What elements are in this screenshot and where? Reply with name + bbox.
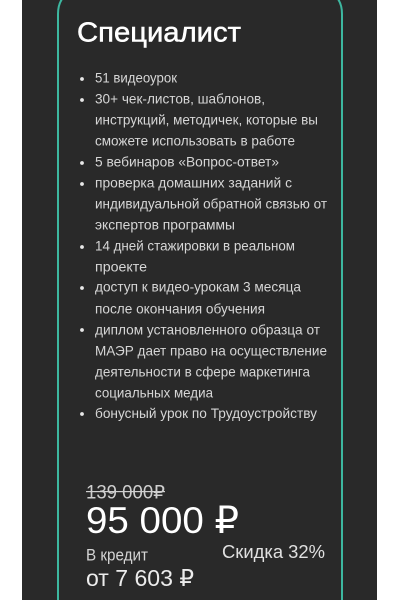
list item: internship: 14 дней стажировки в реальном bbox=[95, 238, 295, 254]
title: Специалист bbox=[77, 16, 241, 48]
credit price: от 7 603 ₽ bbox=[86, 565, 194, 591]
discount label: Скидка 32% bbox=[222, 541, 325, 562]
list item: internship: проекте bbox=[95, 258, 147, 274]
list item: homework review: экспертов программы bbox=[95, 216, 235, 232]
panel: teal rounded card outline bbox=[58, 0, 342, 600]
list item: homework review: проверка домашних заданий с bbox=[95, 174, 292, 190]
credit label: В кредит bbox=[86, 546, 148, 564]
list item: diploma: деятельности в сфере маркетинга bbox=[95, 364, 310, 380]
list item: video lessons: 51 видеоурок bbox=[95, 70, 178, 86]
list item: checklists and templates: инструкций, методичек, которые вы bbox=[95, 112, 318, 128]
feature list bbox=[80, 70, 328, 421]
list item: diploma: диплом установленного образца от bbox=[95, 322, 321, 338]
list item: webinars: 5 вебинаров «Вопрос-ответ» bbox=[95, 154, 279, 170]
list item: checklists and templates bbox=[80, 90, 318, 148]
list item: video access: после окончания обучения bbox=[95, 300, 265, 316]
old price, struck through: 139 000₽ bbox=[86, 482, 165, 504]
list item: checklists and templates: сможете использовать в работе bbox=[95, 132, 295, 148]
list item: internship bbox=[80, 238, 295, 274]
list item: bonus lesson: бонусный урок по Трудоустройству bbox=[95, 405, 317, 421]
list item: diploma: социальных медиа bbox=[95, 384, 213, 400]
list item: homework review: индивидуальной обратной связью от bbox=[95, 196, 328, 212]
list item: checklists and templates: 30+ чек-листов, шаблонов, bbox=[95, 90, 265, 106]
list item: diploma: МАЭР дает право на осуществление bbox=[95, 342, 327, 358]
current price: 95 000 ₽ bbox=[86, 500, 239, 541]
list item: homework review bbox=[80, 174, 328, 232]
list item: diploma bbox=[80, 322, 327, 400]
list item: video access bbox=[80, 278, 301, 316]
list item: video access: доступ к видео-урокам 3 месяца bbox=[95, 278, 301, 294]
